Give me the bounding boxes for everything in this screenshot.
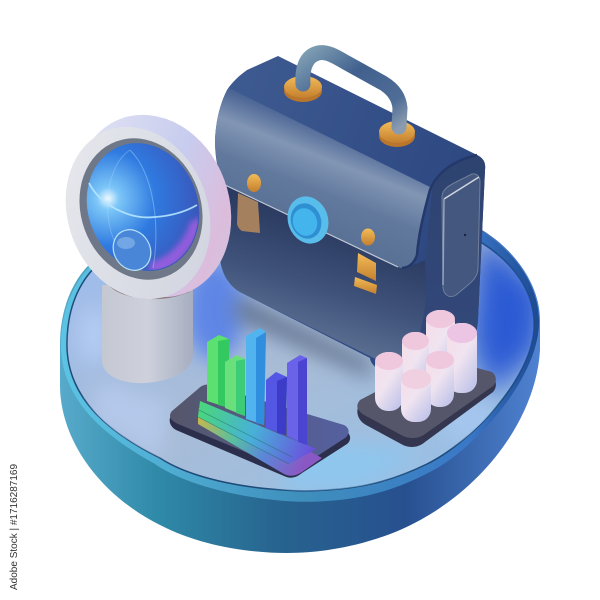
platform top surface <box>67 220 534 491</box>
platform rim highlight <box>61 213 539 502</box>
watermark: stock id: Adobe Stock | #1716287169 <box>9 464 20 590</box>
icon: magnifying glass with globe <box>66 114 232 384</box>
platform side wall <box>60 209 540 553</box>
front cylinder <box>401 369 431 422</box>
briefcase lower body <box>220 183 440 371</box>
middle left cylinder <box>402 332 429 392</box>
back cylinder <box>426 310 455 376</box>
left buckle <box>237 193 260 233</box>
rainbow base layer <box>198 415 322 476</box>
lens front ring <box>42 106 234 320</box>
bar chart on tray <box>170 328 350 478</box>
gold stud right <box>361 228 375 246</box>
left cylinder <box>375 352 403 411</box>
bar 1 green <box>207 335 229 408</box>
side pocket <box>442 174 480 297</box>
round blue lock <box>281 191 335 249</box>
right buckle lower <box>354 277 377 294</box>
tray top <box>357 358 496 438</box>
right buckle upper <box>357 253 376 281</box>
bar 4 indigo <box>266 372 287 435</box>
icon: briefcase <box>215 53 485 372</box>
stand <box>102 285 193 383</box>
briefcase silhouette and top <box>215 56 485 370</box>
globe lines <box>89 150 197 268</box>
layer separators <box>198 410 292 464</box>
flap seam <box>225 185 398 267</box>
cylinders on tray <box>357 310 496 447</box>
center cylinder <box>426 351 454 407</box>
lens inner <box>60 121 222 297</box>
rainbow middle layer <box>198 408 316 464</box>
flap side edge <box>402 155 477 268</box>
glossy bubble <box>106 223 158 277</box>
bar 2 green <box>225 355 245 416</box>
rainbow top layer <box>199 401 307 457</box>
right side panel <box>400 155 485 372</box>
tray top <box>170 385 349 470</box>
stand collar <box>107 272 190 299</box>
handle mount right <box>379 121 415 147</box>
purple reflection <box>146 214 198 270</box>
briefcase handle <box>303 53 400 127</box>
right cylinder <box>447 323 477 393</box>
handle mount left <box>284 76 322 102</box>
platform: round blue base <box>60 209 545 553</box>
lens back ring <box>50 93 256 319</box>
gold stud left <box>247 174 261 192</box>
flap front face <box>215 88 430 268</box>
tray base <box>170 388 350 478</box>
surface lighting <box>78 235 545 490</box>
tray edge <box>357 362 496 447</box>
bar 3 blue <box>246 328 266 425</box>
globe <box>69 127 217 287</box>
bar 5 violet <box>287 355 307 445</box>
